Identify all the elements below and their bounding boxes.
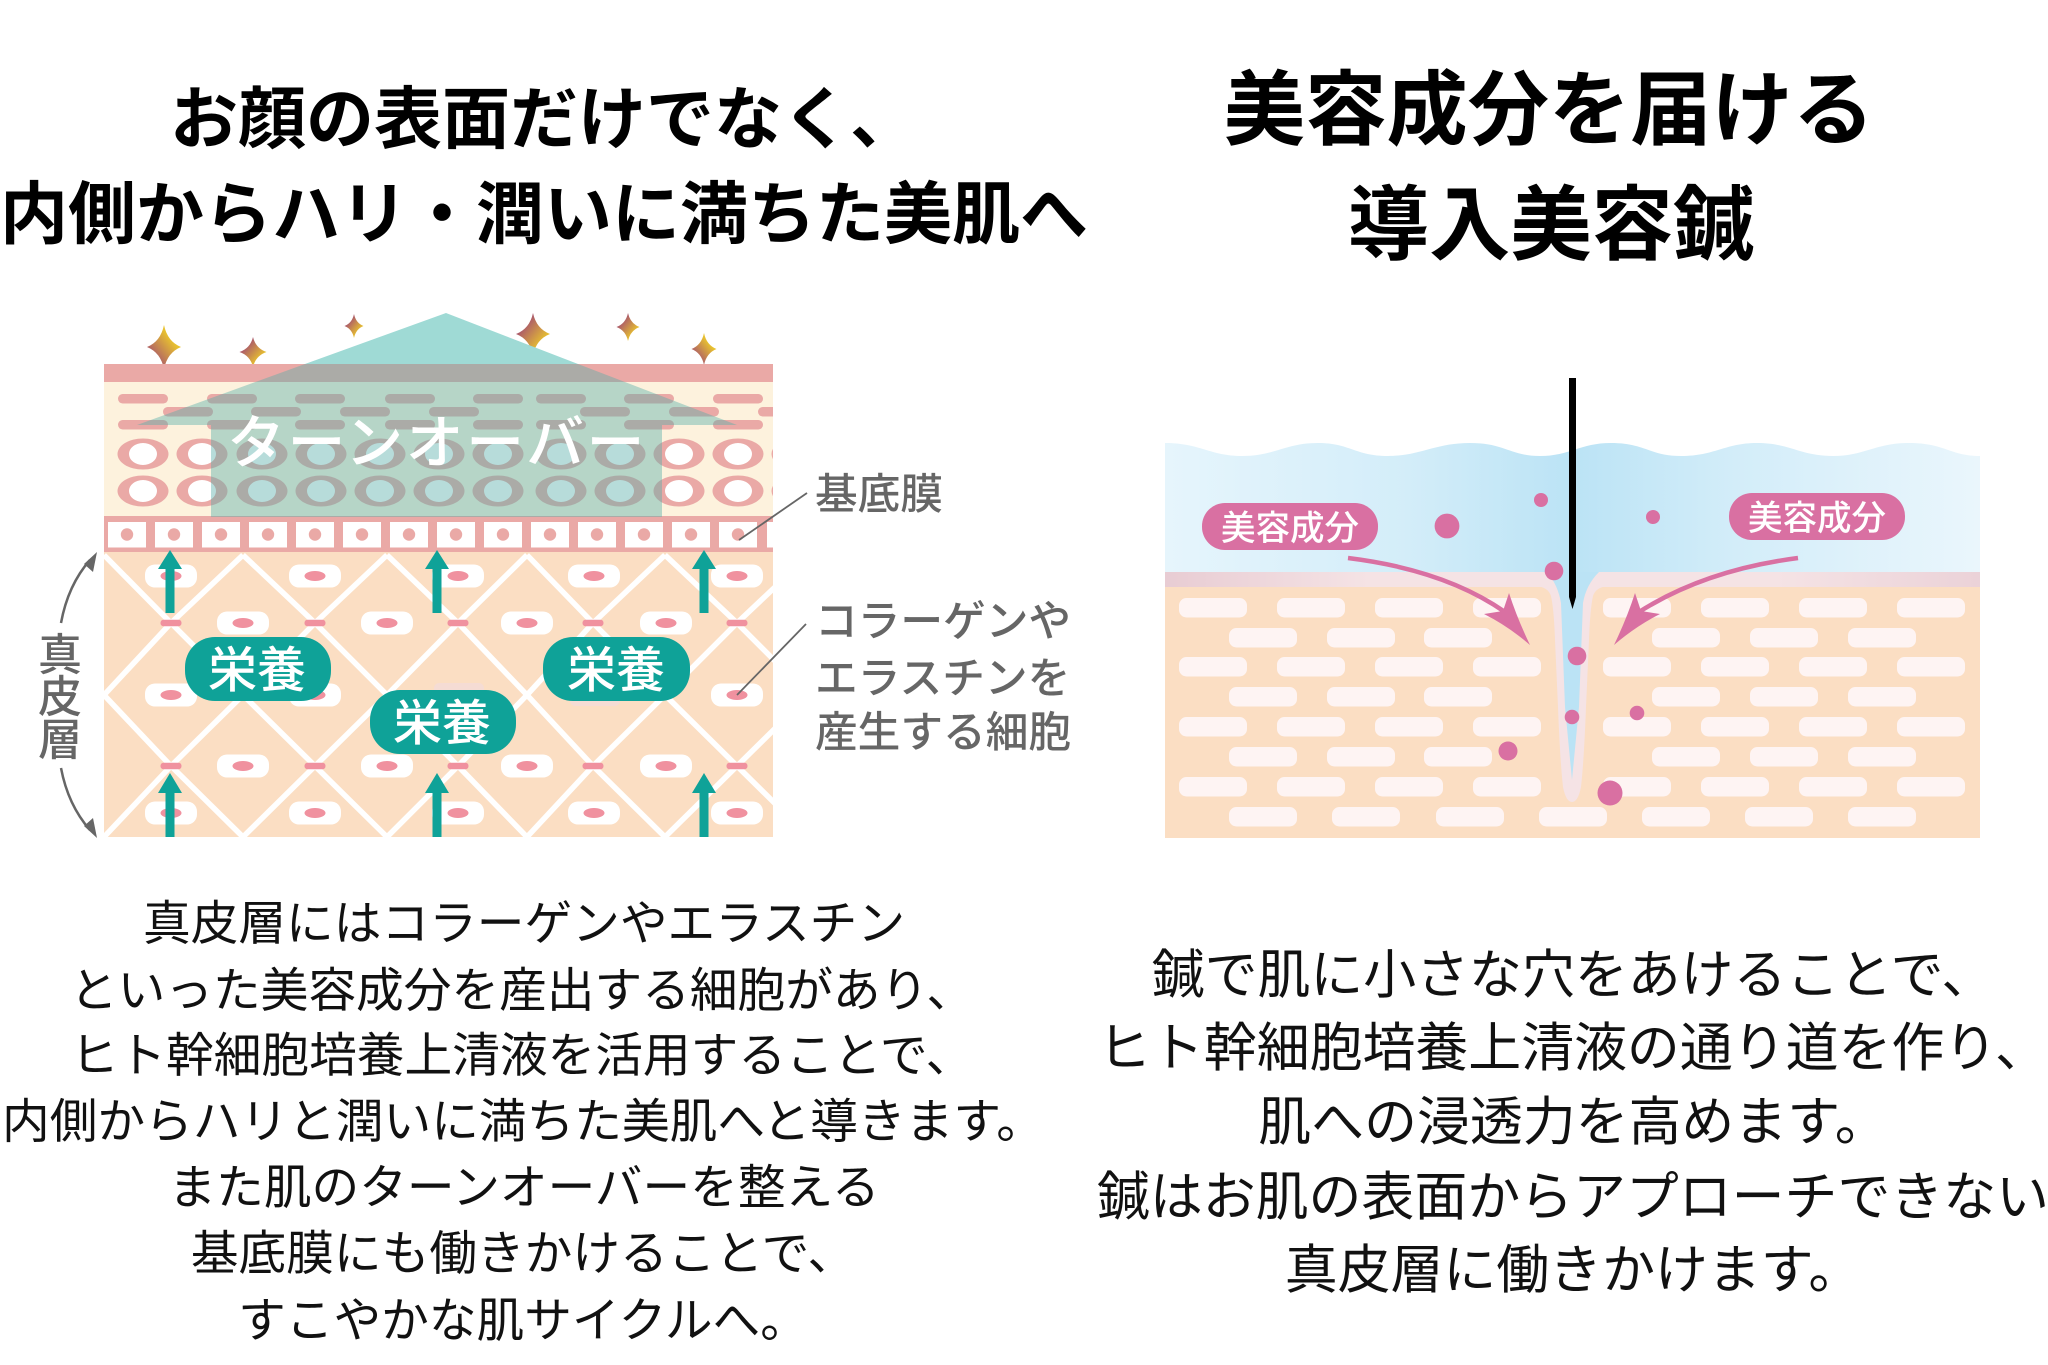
diagram: skin cross-section with turnover: [104, 313, 822, 837]
nutrient pill 3: [543, 637, 690, 701]
nutrient pill 1: 栄養: [208, 644, 306, 698]
right ingredient pill: [1729, 493, 1905, 540]
left body text: といった美容成分を産出する細胞があり、: [70, 965, 974, 1018]
dermis label: 層: [38, 716, 82, 765]
left body text: また肌のターンオーバーを整える: [168, 1162, 880, 1215]
left body text: 内側からハリと潤いに満ちた美肌へと導きます。: [2, 1096, 1044, 1149]
title: right heading: [1224, 65, 1874, 271]
right body text: ヒト幹細胞培養上清液の通り道を作り、: [1098, 1019, 2048, 1078]
callout: collagen cells: コラーゲンや: [815, 598, 1071, 646]
dermis layer: [104, 552, 809, 837]
nutrient pill 2: 栄養: [393, 697, 491, 751]
epidermis layers: [104, 364, 822, 518]
turnover label: ターンオーバー: [227, 411, 647, 476]
skin cells: [1179, 598, 1965, 826]
callout: basement membrane: 基底膜: [815, 471, 943, 519]
left ingredient pill: [1202, 503, 1378, 550]
dermis label: [38, 631, 82, 765]
right body text: 鍼はお肌の表面からアプローチできない: [1097, 1168, 2048, 1227]
title: right heading: 美容成分を届ける: [1224, 65, 1874, 156]
left body text: 基底膜にも働きかけることで、: [191, 1228, 855, 1281]
callout: collagen cells: [737, 598, 1071, 757]
beauty ingredient dots: [1435, 493, 1660, 806]
turnover arrow: [137, 313, 737, 517]
diagram: microneedle skin section: [1165, 378, 1980, 838]
title: right heading: 導入美容鍼: [1348, 180, 1754, 271]
dermis label: 皮: [38, 673, 82, 722]
needle: [1569, 378, 1576, 609]
right body text: 真皮層に働きかけます。: [1285, 1241, 1861, 1300]
left ingredient pill: 美容成分: [1221, 510, 1359, 548]
nutrient pill 3: 栄養: [567, 644, 665, 698]
left body text: すこやかな肌サイクルへ。: [238, 1295, 808, 1348]
left body text: ヒト幹細胞培養上清液を活用することで、: [71, 1030, 973, 1083]
dermis bracket: [38, 552, 97, 838]
callout: collagen cells: エラスチンを: [815, 655, 1070, 703]
callout: basement membrane: [739, 471, 943, 540]
right body text: 鍼で肌に小さな穴をあけることで、: [1152, 946, 1994, 1005]
nutrient arrows: [158, 550, 716, 837]
nutrient pill 1: [185, 637, 331, 701]
nutrient pill 2: [370, 690, 516, 754]
title: left heading: 内側からハリ・潤いに満ちた美肌へ: [0, 177, 1088, 253]
right ingredient pill: 美容成分: [1748, 500, 1886, 538]
right body text: [1097, 946, 2048, 1300]
puncture channel: [1536, 572, 1608, 802]
water layer: [1165, 443, 1980, 572]
title: left heading: お顔の表面だけでなく、: [170, 82, 918, 158]
left curved arrow: [1348, 558, 1530, 645]
basal membrane row: [104, 516, 773, 552]
callout: collagen cells: 産生する細胞: [815, 709, 1071, 757]
sparkles: [147, 313, 716, 369]
skin surface band: [1165, 572, 1980, 587]
title: left heading: [0, 82, 1088, 253]
left body text: 真皮層にはコラーゲンやエラスチン: [143, 898, 905, 951]
right body text: 肌への浸透力を高めます。: [1258, 1093, 1888, 1152]
left body text: [2, 898, 1044, 1348]
right curved arrow: [1614, 558, 1798, 645]
skin base: [1165, 587, 1980, 838]
dermis label: 真: [38, 631, 82, 680]
